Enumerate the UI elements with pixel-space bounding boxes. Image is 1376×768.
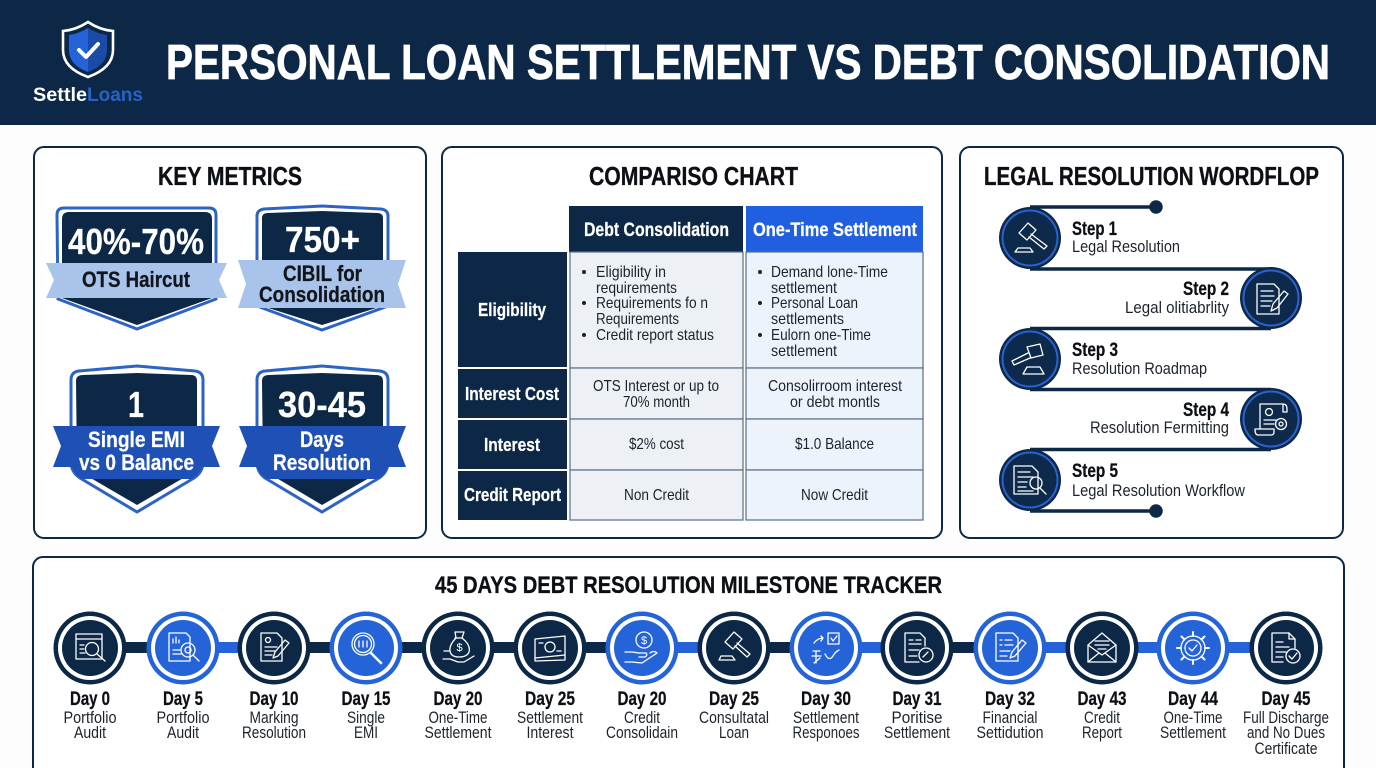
milestone: day 45: Day 45 xyxy=(1262,689,1311,710)
metric badge: OTS haircut xyxy=(46,208,227,329)
comparison table: Requirements fo n xyxy=(596,295,708,312)
panel: key metrics xyxy=(34,147,426,538)
comparison table: Consolirroom interest xyxy=(768,378,902,395)
timeline connector xyxy=(90,642,1286,653)
milestone: day 10 xyxy=(238,612,310,742)
milestone: day 0: Portfolio xyxy=(64,709,116,727)
milestone: day 30: Day 30 xyxy=(801,689,851,710)
step 4: Step 4 xyxy=(1183,400,1229,421)
milestone: day 20 xyxy=(422,612,494,742)
comparison table: Interest Cost xyxy=(465,383,559,404)
header band xyxy=(0,0,1376,125)
step 2 xyxy=(1125,267,1302,329)
milestone: day 25 loan: Day 25 xyxy=(709,689,759,710)
comparison table: $1.0 Balance xyxy=(795,436,874,453)
step 2: Step 2 xyxy=(1183,279,1229,300)
milestone: day 45: and No Dues xyxy=(1247,724,1325,742)
milestone: day 25: Day 25 xyxy=(525,689,575,710)
icon: document with badge xyxy=(905,633,933,662)
milestone: day 43 xyxy=(1066,612,1138,742)
milestone: day 25 loan: Consultatal xyxy=(699,709,769,727)
milestone: day 32: Financial xyxy=(982,709,1038,727)
comparison table: Demand lone-Time xyxy=(771,264,888,281)
milestone: day 15: EMI xyxy=(354,724,378,742)
comparison table: settlements xyxy=(771,311,844,328)
milestone: day 20: One-Time xyxy=(428,709,488,727)
panel: legal resolution workflow xyxy=(960,147,1343,538)
milestone: day 25: Interest xyxy=(526,724,574,742)
milestone: day 44 xyxy=(1156,612,1230,742)
milestone: day 10: Day 10 xyxy=(250,689,298,710)
milestone: day 10: Resolution xyxy=(242,724,306,742)
milestone: day 20: Day 20 xyxy=(434,689,482,710)
step 4: Resolution Fermitting xyxy=(1090,419,1229,437)
milestone: day 25 xyxy=(514,612,586,742)
comparison table: Credit report status xyxy=(596,327,714,344)
milestone: day 44: Day 44 xyxy=(1168,689,1218,710)
metric badge: single EMI: vs 0 Balance xyxy=(79,450,194,475)
icon: gavel xyxy=(1012,344,1044,374)
metric badge: CIBIL: CIBIL for xyxy=(283,261,362,286)
metric badge: OTS haircut: 40%-70% xyxy=(68,221,204,262)
step 2: Legal olitiabrlity xyxy=(1125,299,1230,317)
milestone: day 25 loan xyxy=(698,612,770,742)
metric badge: single EMI: Single EMI xyxy=(88,427,185,452)
icon: process flow xyxy=(812,633,839,663)
metric badge: CIBIL: Consolidation xyxy=(259,282,385,307)
comparison table: Eligibility xyxy=(478,299,547,320)
milestone: day 32: Settidution xyxy=(976,724,1044,742)
milestone: day 43: Day 43 xyxy=(1078,689,1126,710)
metric badge: OTS haircut: OTS Haircut xyxy=(82,267,191,292)
milestone: day 31: Poritise xyxy=(892,709,942,727)
milestone: day 31: Settlement xyxy=(884,724,950,742)
milestone: day 32 xyxy=(974,612,1046,742)
milestone: day 30 xyxy=(790,612,862,742)
comparison table: Eulorn one-Time xyxy=(771,327,871,344)
comparison table: 70% month xyxy=(623,394,690,411)
comparison table: Personal Loan xyxy=(771,295,858,312)
icon: checklist with pen xyxy=(996,633,1026,661)
milestone: day 15: Day 15 xyxy=(342,689,391,710)
metric badge: days resolution: Resolution xyxy=(273,450,371,475)
metric badge: single EMI xyxy=(53,366,220,512)
icon: document with pen xyxy=(261,633,289,661)
metric badge: days resolution: 30-45 xyxy=(278,384,366,425)
heading: comparison chart: COMPARISO CHART xyxy=(589,161,798,191)
comparison table: or debt montls xyxy=(790,394,880,411)
icon: money bag on hand: $ xyxy=(456,642,463,654)
comparison table: $2% cost xyxy=(629,436,684,453)
icon: browser search xyxy=(76,634,105,661)
icon: gavel xyxy=(1015,223,1047,252)
milestone: day 15: Single xyxy=(347,709,385,727)
milestone: day 31 xyxy=(880,612,954,742)
panel: milestone tracker xyxy=(33,557,1344,768)
step 1: Step 1 xyxy=(1072,219,1117,240)
icon: scroll with seal xyxy=(1255,404,1287,435)
milestone: day 5: Audit xyxy=(167,724,199,742)
step 5: Legal Resolution Workflow xyxy=(1072,482,1245,500)
milestone: day 0 xyxy=(54,612,126,742)
icon: EMI magnifier xyxy=(352,633,381,663)
comparison table: Now Credit xyxy=(801,487,868,504)
comparison table: OTS Interest or up to xyxy=(593,378,719,395)
comparison table: Interest xyxy=(484,434,540,455)
milestone: day 44: Settlement xyxy=(1160,724,1226,742)
milestone: day 20 credit: Credit xyxy=(624,709,660,727)
milestone: day 44: One-Time xyxy=(1164,709,1222,727)
metric badge: single EMI: 1 xyxy=(128,384,144,425)
step 3: Step 3 xyxy=(1072,340,1118,361)
milestone: day 20: Settlement xyxy=(424,724,492,742)
comparison table: settlement xyxy=(771,280,837,297)
milestone: day 15 xyxy=(330,612,402,742)
step 5 xyxy=(999,449,1245,511)
milestone: day 0: Audit xyxy=(74,724,106,742)
step 1 xyxy=(999,207,1180,269)
milestone: day 0: Day 0 xyxy=(70,689,110,710)
milestone: day 43: Credit xyxy=(1084,709,1120,727)
milestone: day 10: Marking xyxy=(250,709,298,727)
milestone: day 20 credit xyxy=(606,612,678,742)
icon: gear with check xyxy=(1177,632,1209,664)
milestone: day 5: Portfolio xyxy=(156,709,210,727)
icon: document with check xyxy=(1272,633,1300,663)
milestone: day 32: Day 32 xyxy=(985,689,1035,710)
comparison table: Non Credit xyxy=(624,487,689,504)
comparison table: requirements xyxy=(596,280,677,297)
milestone: day 30: Settlement xyxy=(793,709,859,727)
metric badge: CIBIL: 750+ xyxy=(285,219,360,260)
milestone: day 31: Day 31 xyxy=(892,689,942,710)
metric badge: CIBIL xyxy=(238,206,406,330)
milestone: day 5 xyxy=(146,612,220,742)
comparison table: Debt Consolidation xyxy=(584,220,729,241)
milestone: day 20 credit: Day 20 xyxy=(618,689,666,710)
milestone: day 25: Settlement xyxy=(517,709,583,727)
step 4 xyxy=(1090,388,1302,450)
metric badge: days resolution: Days xyxy=(300,427,344,452)
comparison table: Requirements xyxy=(596,311,679,328)
metric badge: days resolution xyxy=(239,366,406,512)
comparison table: settlement xyxy=(771,343,837,360)
heading: key metrics: KEY METRICS xyxy=(158,161,302,191)
logo: SettleLoans: Settle xyxy=(33,85,87,106)
logo: SettleLoans: Loans xyxy=(87,85,143,106)
milestone: day 45 xyxy=(1243,612,1329,758)
logo: SettleLoans xyxy=(33,22,143,106)
icon: document with pen xyxy=(1257,284,1288,314)
icon: report search xyxy=(169,633,199,661)
comparison table: Credit Report xyxy=(464,484,561,505)
step 5: Step 5 xyxy=(1072,461,1118,482)
workflow connector path xyxy=(1030,202,1271,516)
milestone: day 20 credit: Consolidain xyxy=(606,724,678,742)
icon: coin on hand: $ xyxy=(641,635,647,647)
step 1: Legal Resolution xyxy=(1072,238,1180,256)
step 3 xyxy=(999,328,1207,390)
comparison table xyxy=(458,206,923,520)
milestone: day 25 loan: Loan xyxy=(719,724,749,742)
milestone: day 45: Full Discharge xyxy=(1243,709,1329,727)
icon: open envelope xyxy=(1088,633,1116,662)
icon: banknotes xyxy=(535,636,565,661)
comparison table: One-Time Settlement xyxy=(753,220,918,241)
panel: comparison chart xyxy=(442,147,942,538)
icon: document with magnifier xyxy=(1014,466,1046,494)
milestone: day 30: Responoes xyxy=(792,724,860,742)
milestone: day 5: Day 5 xyxy=(163,689,203,710)
comparison table: Eligibility in xyxy=(596,264,666,281)
milestone: day 45: Certificate xyxy=(1254,740,1318,758)
heading: tracker: 45 DAYS DEBT RESOLUTION MILESTONE TRACKER xyxy=(435,572,942,599)
milestone: day 43: Report xyxy=(1082,724,1122,742)
step 3: Resolution Roadmap xyxy=(1072,360,1207,378)
icon: gavel xyxy=(719,632,750,660)
